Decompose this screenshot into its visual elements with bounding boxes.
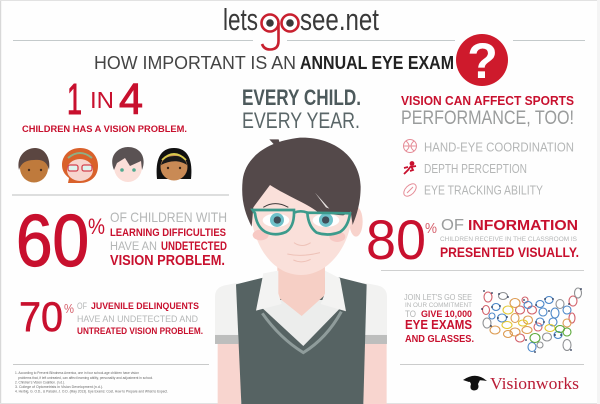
- map: USA made of glasses: [481, 288, 582, 353]
- callout: join let's go see: IN OUR COMMITMENT: [405, 303, 472, 309]
- panel: sports performance: PERFORMANCE, TOO!: [401, 108, 574, 129]
- callout: join let's go see: GIVE 10,000: [421, 309, 472, 319]
- stat: 80% information: PRESENTED VISUALLY.: [440, 244, 579, 260]
- title: ANNUAL EYE EXAM: [300, 52, 454, 73]
- stat: 70% juvenile delinquents: UNTREATED VISION PROBLEM.: [77, 326, 203, 336]
- stat: 70% juvenile delinquents: JUVENILE DELINQUENTS: [91, 301, 199, 312]
- illustration: boy with glasses: [215, 138, 387, 404]
- callout: join let's go see: JOIN LET'S GO SEE: [404, 293, 472, 302]
- logo: letsgosee.net: lets: [223, 2, 258, 37]
- hair tuft: [269, 139, 281, 147]
- icon: question mark badge: [456, 33, 508, 89]
- stat: 80% information: OF: [441, 217, 464, 234]
- stat: 80% information: [366, 208, 579, 271]
- right arm and sleeve: [363, 283, 387, 404]
- stat: 70% juvenile delinquents: HAVE AN UNDETECTED AND: [77, 314, 198, 324]
- footnotes: problems that, if left untreated, can affect learning ability, personality and adjustment in school.: [18, 376, 153, 380]
- footnotes: [15, 371, 168, 394]
- neck: [277, 263, 325, 316]
- footnotes: 2. Children's Vision Coalition. (n.d.).: [15, 380, 65, 384]
- sweater vest: [236, 278, 367, 404]
- stat: 1 in 4: [22, 75, 187, 135]
- face: boy with dark skin: [18, 148, 49, 182]
- panel: sports performance: HAND-EYE COORDINATION: [424, 140, 574, 154]
- stat: 60% learning difficulties: OF CHILDREN WITH: [110, 209, 227, 225]
- hair highlight: [315, 193, 329, 209]
- footnotes: 4. Herbig, G. O.D., & Paloski, J. O.D. (May 2013). Eye Exams: Cost, How to Prepare and What to Expect.: [15, 390, 168, 394]
- eyes: [263, 213, 339, 227]
- stat: 70% juvenile delinquents: OF: [77, 301, 87, 311]
- logo: letsgosee.net: see.net: [300, 2, 379, 37]
- panel: sports performance: DEPTH PERCEPTION: [424, 161, 527, 176]
- stat: 70% juvenile delinquents: [19, 293, 203, 340]
- stat: 1 in 4: CHILDREN HAS A VISION PROBLEM.: [22, 124, 187, 135]
- callout: join let's go see: AND GLASSES.: [405, 334, 474, 345]
- logo: letsgosee.net: [223, 2, 379, 50]
- panel: sports performance: EYE TRACKING ABILITY: [424, 182, 543, 198]
- eyebrow: [263, 204, 288, 207]
- left arm and sleeve: [215, 283, 241, 404]
- icon: basketball: [404, 140, 416, 152]
- panel: sports performance: VISION CAN AFFECT SPORTS: [401, 94, 574, 108]
- icon: football: [402, 182, 418, 198]
- icon: eye mark: [463, 376, 487, 390]
- panel: sports performance: [401, 94, 574, 198]
- stat: 70% juvenile delinquents: 70: [19, 293, 63, 340]
- collar: [256, 271, 346, 311]
- nose: [294, 243, 311, 245]
- stat: 80% information: INFORMATION: [468, 217, 578, 234]
- footnotes: 3. College of Optometrists in Vision Development (n.d.).: [15, 385, 103, 389]
- stat: 1 in 4: 1: [67, 75, 82, 124]
- logo: Visionworks: Visionworks: [490, 374, 579, 393]
- callout: join let's go see: [404, 293, 474, 345]
- stat: 60% learning difficulties: LEARNING DIFFICULTIES: [110, 227, 226, 239]
- stat: 70% juvenile delinquents: %: [64, 301, 74, 316]
- stat: 1 in 4: 4: [119, 75, 143, 124]
- stat: 60% learning difficulties: VISION PROBLEM.: [110, 253, 225, 269]
- vest neckline stripe: [262, 312, 341, 353]
- mouth: [287, 253, 320, 262]
- shirt front: [263, 300, 340, 346]
- glasses: [253, 210, 350, 234]
- title: HOW IMPORTANT IS AN: [94, 52, 296, 73]
- stat: 80% information: 80: [366, 208, 426, 271]
- stat: 80% information: %: [425, 220, 437, 237]
- icon: runner: [404, 162, 416, 174]
- ear: [349, 207, 363, 237]
- face: boy with grey hair: [112, 147, 144, 182]
- stat: 60% learning difficulties: 60: [16, 201, 89, 282]
- face: [250, 170, 352, 275]
- face: girl with black hair and headband: [157, 148, 191, 180]
- stat: 60% learning difficulties: UNDETECTED: [161, 241, 227, 253]
- stat: 1 in 4: IN: [90, 87, 114, 113]
- hair: [242, 138, 361, 227]
- callout: join let's go see: EYE EXAMS: [405, 318, 472, 332]
- cheeks: [253, 230, 345, 242]
- face: red-haired girl with glasses: [62, 148, 98, 183]
- header rules: [13, 40, 585, 42]
- heading: every child every year: [242, 85, 361, 133]
- heading: every child every year: EVERY YEAR.: [242, 108, 360, 133]
- stat: 80% information: CHILDREN RECEIVE IN THE CLASSROOM IS: [440, 236, 577, 243]
- stat: 60% learning difficulties: HAVE AN: [110, 241, 157, 253]
- heading: every child every year: EVERY CHILD.: [242, 85, 361, 110]
- footnotes: 1. According to Prevent Blindness America, one in four school-age children have vision: [15, 371, 139, 375]
- callout: join let's go see: TO: [405, 309, 416, 319]
- title: [94, 52, 454, 73]
- children faces: [18, 147, 191, 183]
- icon: question mark badge: ?: [467, 33, 498, 89]
- stat: 60% learning difficulties: %: [88, 214, 105, 239]
- stat: 60% learning difficulties: [16, 201, 227, 282]
